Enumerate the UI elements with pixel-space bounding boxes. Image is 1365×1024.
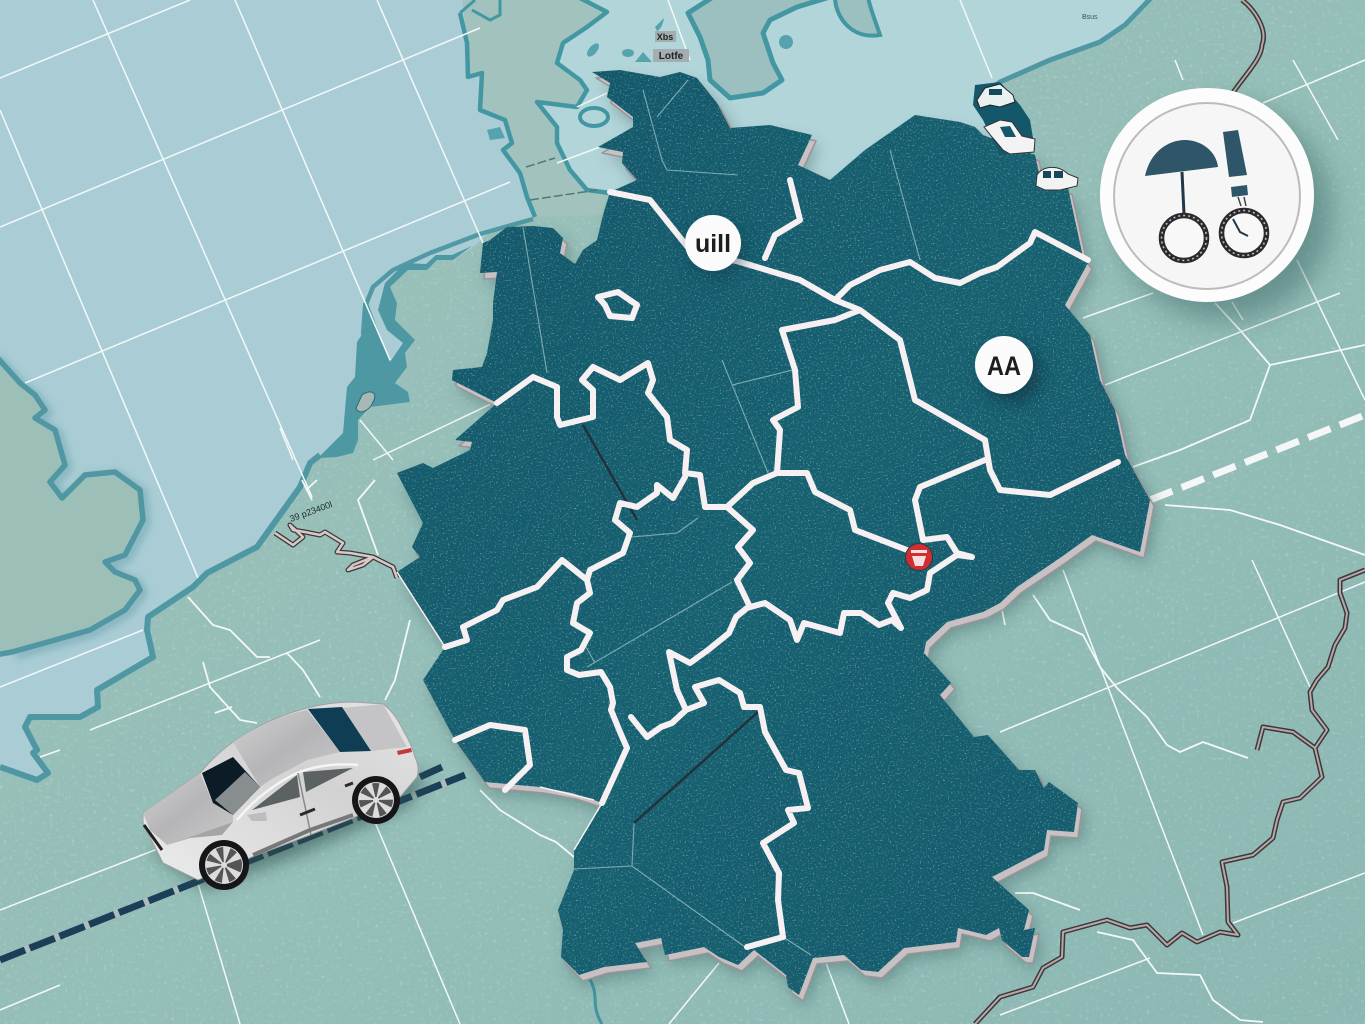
illustration: silver car xyxy=(143,702,430,890)
car one xyxy=(977,84,1015,108)
round islet xyxy=(779,35,793,49)
east Denmark coast xyxy=(537,0,610,193)
grille xyxy=(144,825,162,850)
Germany raised edge xyxy=(401,76,1154,1001)
Baltic Sea xyxy=(537,0,1155,200)
windshield xyxy=(202,757,260,815)
Denmark land tint xyxy=(462,0,610,217)
label: coast text: 39 p23400l xyxy=(288,499,334,524)
label: top island tags: Xbs xyxy=(657,32,673,42)
icon panel: umbrella, exclamation and wheels xyxy=(1100,88,1332,321)
rear deck xyxy=(342,704,407,751)
hood xyxy=(143,773,233,845)
right wheel xyxy=(1222,210,1266,256)
dashed route west xyxy=(0,767,465,960)
North Sea xyxy=(0,0,535,780)
Great Britain xyxy=(0,355,143,655)
rear wheel xyxy=(352,776,400,824)
dashed route east xyxy=(1150,415,1365,500)
badge: uill: uill xyxy=(695,230,731,258)
Dutch inland sea xyxy=(318,246,472,458)
border river west xyxy=(275,525,397,578)
Wadden Sea ribbon xyxy=(363,219,533,335)
Danish small islets xyxy=(487,18,664,140)
north Denmark inlet xyxy=(460,0,500,20)
dark coastal islet xyxy=(973,82,1035,155)
lower sill xyxy=(253,815,353,855)
rear window xyxy=(308,707,371,752)
left wheel xyxy=(1162,216,1206,260)
icon: small cars on north coast xyxy=(973,82,1078,190)
hood shadow xyxy=(167,822,233,845)
dark seams xyxy=(583,425,758,823)
small polder xyxy=(356,392,375,412)
window chrome xyxy=(237,764,358,820)
label: top island tags: Lotfe xyxy=(659,51,684,62)
thin state lines xyxy=(523,80,920,955)
south river xyxy=(589,978,602,1024)
Baltic coast xyxy=(975,0,1152,100)
label: top island tags xyxy=(653,31,689,62)
label: top right tag: Bsus xyxy=(1082,14,1098,21)
inner Denmark lines xyxy=(526,158,597,200)
Germany map xyxy=(390,60,1160,1000)
badge: AA: AA xyxy=(987,351,1021,381)
car body xyxy=(143,702,418,880)
neighbouring white borders xyxy=(188,303,1365,1022)
Great Britain shadow xyxy=(0,358,146,655)
badge: AA xyxy=(975,336,1042,403)
car three xyxy=(1036,167,1078,190)
car two xyxy=(984,120,1035,154)
umbrella xyxy=(1145,140,1218,176)
roof xyxy=(233,710,340,787)
exclamation mark xyxy=(1223,130,1248,197)
front wheel xyxy=(199,840,249,890)
speckle texture xyxy=(390,60,1160,1000)
west Denmark coast xyxy=(460,13,535,217)
border river east xyxy=(975,570,1365,1024)
door handles and mirror xyxy=(300,783,353,815)
thin white coast xyxy=(397,572,629,850)
badge: uill xyxy=(685,215,746,278)
Germany shadow xyxy=(404,81,1157,1006)
icon: red location pin xyxy=(905,543,933,571)
small island xyxy=(835,0,880,36)
tail light xyxy=(397,748,412,755)
continental coastline xyxy=(0,455,320,780)
border river top right xyxy=(1232,0,1264,94)
side windows xyxy=(252,768,353,810)
state boundaries xyxy=(445,180,1118,947)
Danish island xyxy=(688,0,830,98)
door line xyxy=(298,773,311,835)
